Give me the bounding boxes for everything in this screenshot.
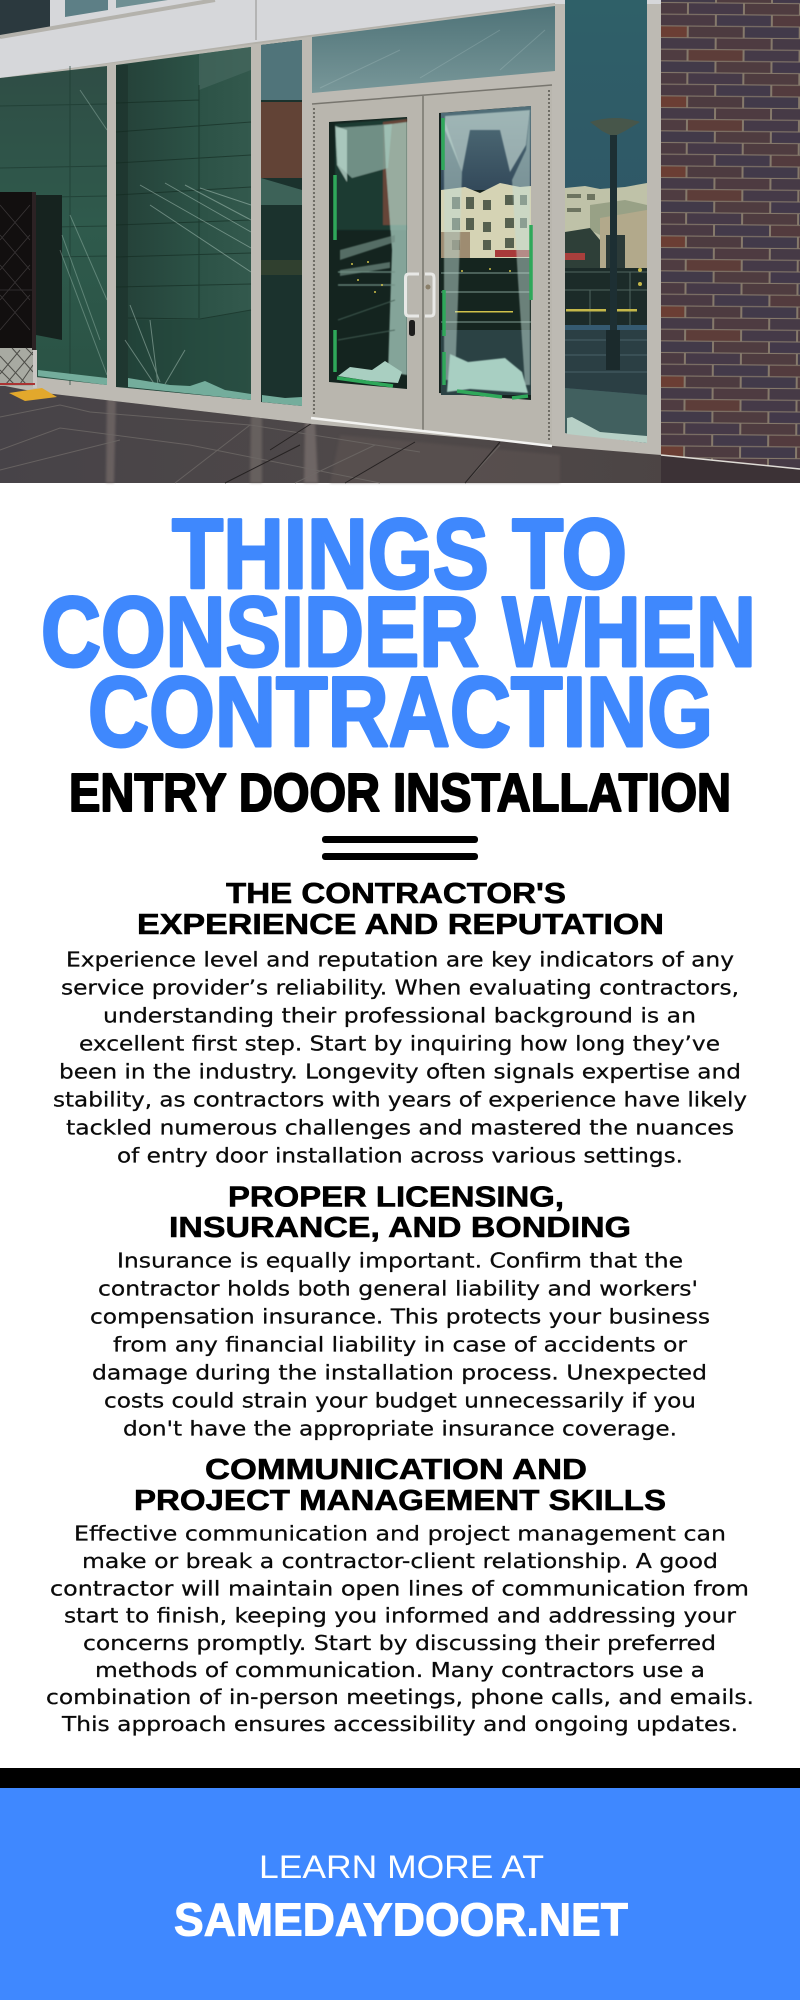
body text: contractor will maintain open lines of communication from bbox=[50, 1576, 749, 1600]
black band bbox=[0, 1768, 800, 1788]
body text: make or break a contractor-client relationship. A good bbox=[82, 1549, 718, 1573]
body text: excellent first step. Start by inquiring how long they’ve bbox=[79, 1032, 720, 1056]
left door glass bbox=[329, 117, 407, 389]
body text: damage during the installation process. Unexpected bbox=[92, 1360, 707, 1384]
body text bbox=[46, 1522, 754, 1736]
body text: methods of communication. Many contractors use a bbox=[95, 1658, 705, 1682]
brick base bbox=[661, 455, 800, 483]
body text bbox=[90, 1248, 710, 1440]
title: THINGS TO bbox=[172, 498, 627, 609]
door handles bbox=[406, 274, 434, 336]
body text: service provider’s reliability. When evaluating contractors, bbox=[61, 976, 739, 1000]
heading bbox=[169, 1182, 631, 1244]
footer panel bbox=[0, 1788, 800, 2000]
body text: costs could strain your budget unnecessarily if you bbox=[104, 1388, 696, 1412]
construction fence bbox=[0, 192, 57, 401]
heading: THE CONTRACTOR'S bbox=[226, 878, 566, 910]
body text: from any financial liability in case of accidents or bbox=[113, 1332, 688, 1356]
wall cladding bbox=[0, 0, 661, 90]
divider bars bbox=[322, 836, 478, 860]
heading: PROPER LICENSING, bbox=[228, 1182, 564, 1214]
body text: Effective communication and project management can bbox=[74, 1522, 726, 1546]
body text: Insurance is equally important. Confirm that the bbox=[117, 1248, 683, 1272]
body text bbox=[53, 948, 747, 1168]
section: contractor's experience and reputation bbox=[53, 878, 747, 1168]
heading bbox=[134, 1454, 666, 1517]
heading: PROJECT MANAGEMENT SKILLS bbox=[134, 1485, 666, 1517]
right door glass bbox=[439, 106, 531, 400]
window frames bbox=[0, 4, 661, 455]
body text: concerns promptly. Start by discussing their preferred bbox=[83, 1631, 716, 1655]
transom window bbox=[312, 6, 555, 93]
pavement bbox=[0, 370, 800, 483]
footer label: LEARN MORE AT bbox=[259, 1849, 544, 1885]
heading bbox=[137, 878, 664, 941]
title: CONTRACTING bbox=[88, 656, 713, 767]
body text: stability, as contractors with years of experience have likely bbox=[53, 1088, 747, 1112]
body text: compensation insurance. This protects your business bbox=[90, 1304, 710, 1328]
right sidelight window bbox=[565, 0, 647, 443]
body text: start to finish, keeping you informed and addressing your bbox=[64, 1604, 737, 1628]
glass pane 1 bbox=[0, 66, 107, 385]
hero photo: entry door bbox=[0, 0, 800, 483]
glass pane 3 bbox=[261, 40, 302, 406]
heading: EXPERIENCE AND REPUTATION bbox=[137, 909, 664, 941]
glass pane 2 bbox=[116, 47, 251, 400]
body text: combination of in-person meetings, phone calls, and emails. bbox=[46, 1685, 754, 1709]
body text: of entry door installation across various settings. bbox=[117, 1144, 683, 1168]
footer url: SAMEDAYDOOR.NET bbox=[174, 1894, 628, 1946]
body text: don't have the appropriate insurance coverage. bbox=[123, 1416, 677, 1440]
body text: been in the industry. Longevity often signals expertise and bbox=[59, 1060, 741, 1084]
body text: tackled numerous challenges and mastered the nuances bbox=[66, 1116, 734, 1140]
door leaves bbox=[311, 85, 552, 446]
body text: understanding their professional background is an bbox=[103, 1004, 696, 1028]
section: licensing, insurance and bonding bbox=[90, 1182, 710, 1440]
section: communication and project management bbox=[46, 1454, 754, 1736]
heading: INSURANCE, AND BONDING bbox=[169, 1212, 631, 1244]
heading: COMMUNICATION AND bbox=[205, 1454, 587, 1486]
title bbox=[41, 498, 756, 767]
brick wall bbox=[661, 0, 800, 469]
body text: contractor holds both general liability and workers' bbox=[98, 1276, 698, 1300]
body text: Experience level and reputation are key indicators of any bbox=[66, 948, 734, 972]
body text: This approach ensures accessibility and ongoing updates. bbox=[61, 1712, 738, 1736]
